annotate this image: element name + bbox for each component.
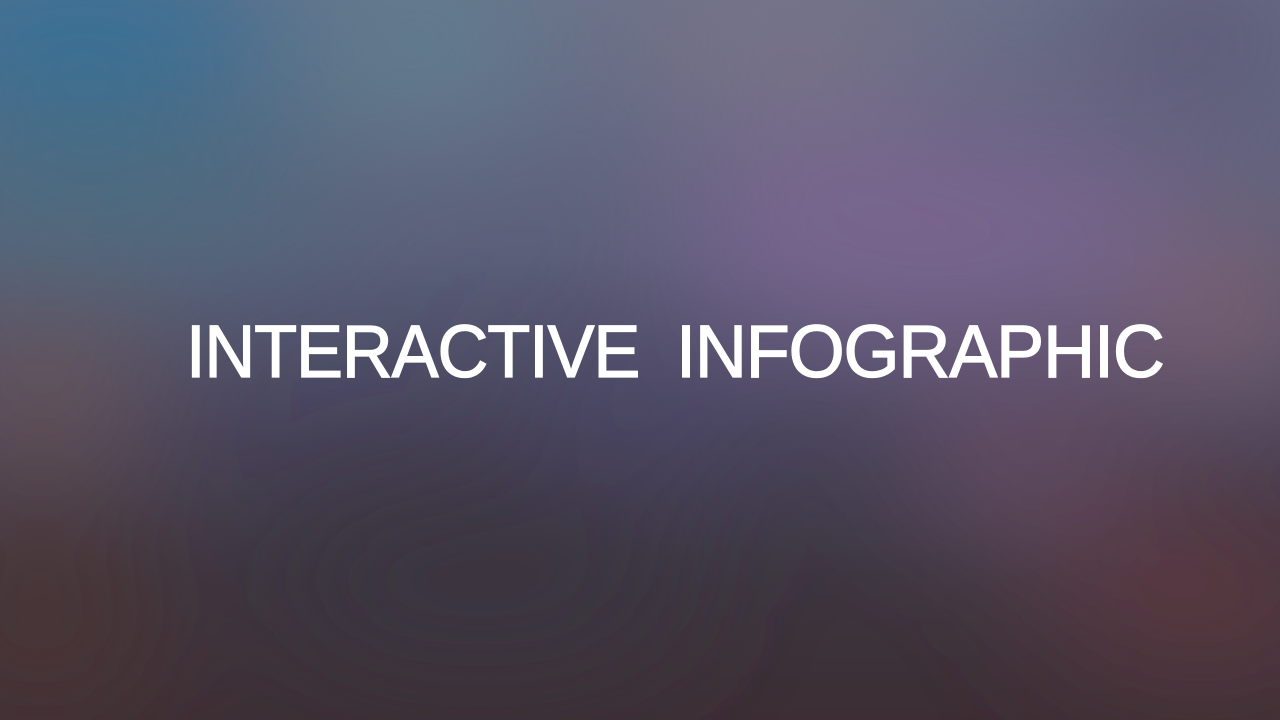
title bbox=[186, 310, 1164, 393]
title: INFOGRAPHIC bbox=[676, 310, 1164, 393]
title: INTERACTIVE bbox=[186, 310, 639, 393]
